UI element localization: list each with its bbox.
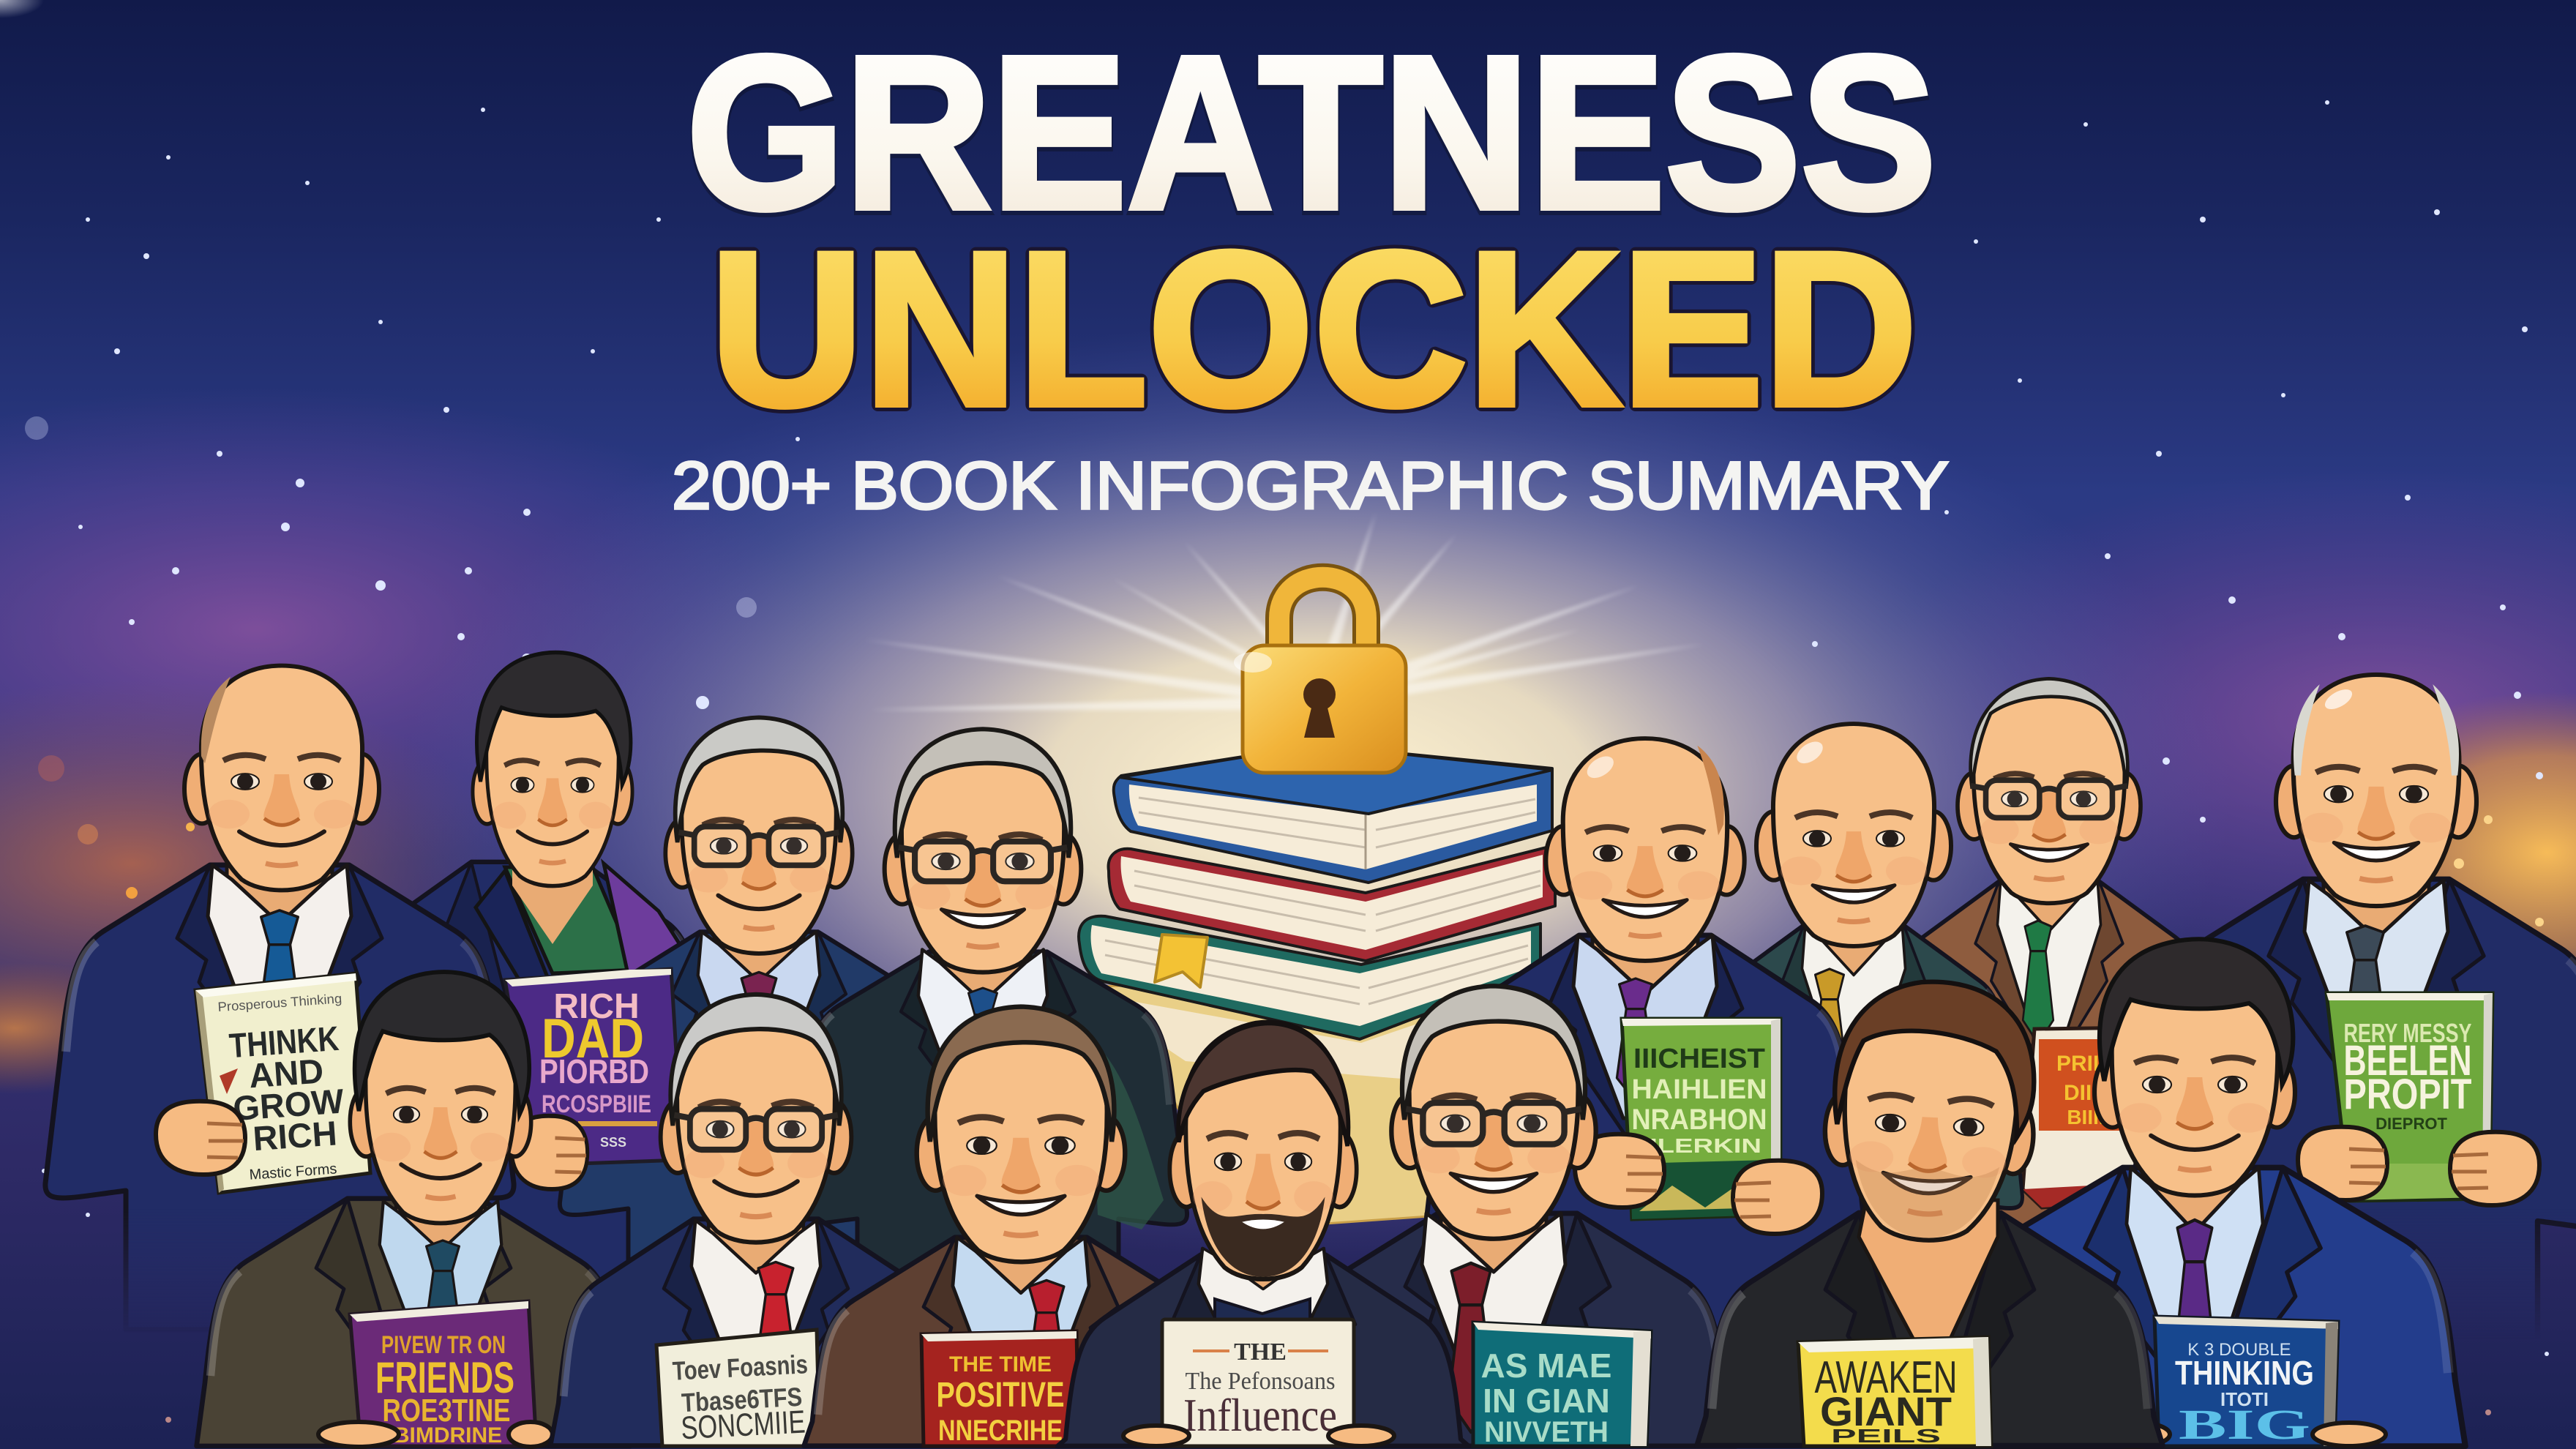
book: Rich Dad: SSS	[600, 1135, 626, 1150]
book: red (partly hidden): PRIID	[2056, 1052, 2115, 1076]
book: cream: SONCMIIE	[680, 1404, 806, 1446]
book stack with padlock	[1074, 577, 1555, 1229]
book: Thinking Big: BIG	[2179, 1401, 2310, 1448]
book: As Mae	[1473, 1322, 1651, 1448]
ribbon bookmark	[1155, 935, 1208, 987]
book: Positive: THE TIME	[949, 1352, 1052, 1377]
book: As Mae: NIVVETH	[1484, 1416, 1609, 1448]
hands	[2097, 1422, 2386, 1447]
person: front row brown hair, brown suit	[804, 1007, 1238, 1447]
book: Think and Grow Rich	[195, 973, 370, 1193]
book: Rich Dad	[505, 969, 683, 1165]
book: green Richest	[1622, 1019, 1781, 1219]
book: Beelen Propit: BEELEN	[2343, 1037, 2472, 1085]
person: back row gray hair glasses	[560, 717, 958, 1327]
teal book	[1079, 916, 1540, 1039]
person: front row dark hair, blue suit	[1940, 939, 2465, 1448]
hand: second person	[512, 1116, 588, 1189]
person: front row center, beard and bow tie	[1057, 1022, 1469, 1446]
title: UNLOCKED: UNLOCKED	[710, 206, 1917, 452]
hands	[1123, 1426, 1394, 1446]
title: UNLOCKED: UNLOCKED	[710, 206, 1917, 452]
book: Positive: POSITIVE	[937, 1376, 1064, 1415]
person: back row bald, blue tie	[45, 666, 514, 1330]
book: How to win Friends: BIMDRINE	[394, 1423, 502, 1448]
book: green Richest: HAIHLIEN	[1632, 1074, 1767, 1105]
person: back row dark hair, purple jacket	[340, 653, 714, 1289]
book: As Mae: IN GIAN	[1483, 1382, 1610, 1420]
book: Rich Dad: DAD	[542, 1008, 644, 1070]
book: Rich Dad: PIORBD	[539, 1052, 649, 1090]
book: red (partly hidden)	[2023, 1027, 2159, 1208]
book: Influence: THE	[1234, 1338, 1287, 1366]
book: green Richest: NRABHON	[1632, 1104, 1767, 1136]
book: Thinking Big	[2154, 1317, 2338, 1448]
hands	[318, 1422, 553, 1447]
hands holding green book	[1575, 1134, 1822, 1234]
book: Positive	[921, 1331, 1079, 1447]
book: Think and Grow Rich: GROW	[232, 1082, 345, 1128]
book: Awaken Giant: AWAKEN	[1815, 1352, 1957, 1403]
book: Think and Grow Rich: AND	[247, 1051, 325, 1095]
title: GREATNESS: GREATNESS	[686, 11, 1936, 255]
red book	[1109, 845, 1555, 961]
book: cream: Tbase6TFS	[681, 1382, 803, 1418]
book: Think and Grow Rich: THINKK	[228, 1019, 340, 1065]
person: bald, purple tie, holding green book	[1423, 738, 1868, 1400]
book: Beelen Propit: DIEPROT	[2375, 1115, 2447, 1133]
person: front row stubble, black jacket	[1697, 976, 2163, 1447]
book: Thinking Big: THINKING	[2175, 1354, 2314, 1392]
book: Think and Grow Rich: Mastic Forms	[249, 1161, 337, 1183]
person: back row glasses, dark green suit	[789, 729, 1187, 1333]
title: GREATNESS: GREATNESS	[686, 14, 1936, 258]
book: How to win Friends: FRIENDS	[375, 1353, 514, 1402]
book: cream	[656, 1330, 820, 1447]
book: Thinking Big: ITOTI	[2220, 1388, 2269, 1410]
book: How to win Friends: PIVEW TR ON	[381, 1331, 506, 1359]
book: Positive: NNECRIHE	[938, 1415, 1063, 1447]
person: front row gray hair, red tie	[550, 995, 962, 1447]
person: front row dark hair, olive suit	[197, 972, 630, 1448]
hands holding Beelen Propit	[2298, 1127, 2539, 1205]
book: As Mae: AS MAE	[1481, 1347, 1611, 1385]
book: Thinking Big: K 3 DOUBLE	[2187, 1340, 2291, 1360]
padlock	[1234, 577, 1406, 773]
blue book	[1114, 745, 1552, 883]
book: red (partly hidden): DIIN	[2064, 1081, 2108, 1105]
person: front row gray hair, dark red tie	[1279, 986, 1736, 1448]
book: Influence: Influence	[1183, 1389, 1337, 1441]
book: green Richest: ULERKIN	[1637, 1134, 1761, 1157]
book: Rich Dad: RICH	[553, 987, 640, 1026]
person: brown jacket, green tie	[1881, 678, 2217, 1276]
book: Think and Grow Rich: Prosperous Thinking	[217, 991, 342, 1014]
book: How to win Friends: ROE3TINE	[382, 1393, 511, 1429]
book: How to win Friends	[350, 1301, 536, 1448]
light rays behind the lock	[864, 512, 1705, 710]
book: Awaken Giant	[1798, 1337, 1991, 1447]
book: Influence: The Pefonsoans	[1186, 1368, 1335, 1395]
book: Awaken Giant: PEILS	[1831, 1425, 1941, 1447]
book: Awaken Giant: GIANT	[1820, 1388, 1952, 1434]
book: cream: Toev Foasnis	[672, 1349, 809, 1386]
subtitle: 200+ BOOK INFOGRAPHIC SUMMARY	[672, 449, 1949, 523]
book: Beelen Propit: PROPIT	[2343, 1071, 2472, 1118]
book: red (partly hidden): BIIII	[2067, 1106, 2105, 1128]
book: green Richest: IIICHEIST	[1633, 1044, 1765, 1074]
book: Think and Grow Rich: RICH	[252, 1113, 338, 1158]
person: bald, yellow tie	[1685, 724, 2022, 1320]
hand: first person	[156, 1101, 245, 1175]
book: Beelen Propit: RERY MESSY	[2343, 1018, 2472, 1048]
gold base book	[1074, 973, 1555, 1229]
person: bald, far right, holding Beelen Propit	[2130, 675, 2576, 1367]
book: Rich Dad: RCOSPBIIE	[542, 1090, 651, 1118]
book: Beelen Propit	[2326, 993, 2493, 1201]
book: Influence	[1162, 1319, 1354, 1446]
